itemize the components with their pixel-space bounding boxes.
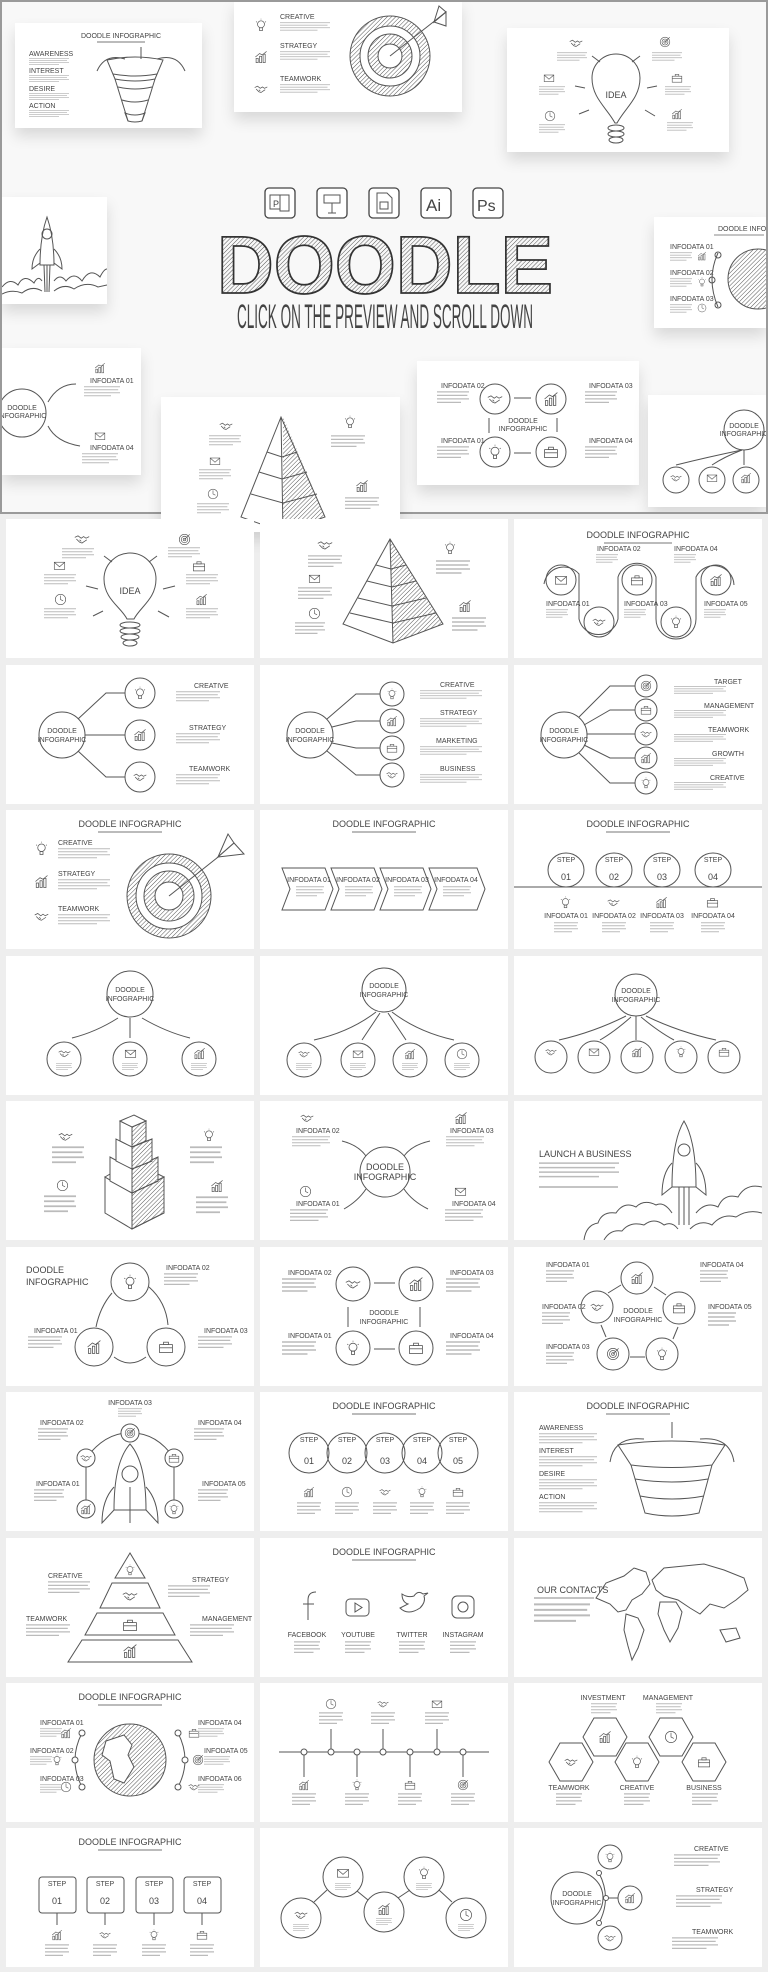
row 7 cell 1: rocket with circles: INFODATA 02 <box>40 1420 84 1427</box>
row 10 cell 1: step boxes <box>6 1828 254 1967</box>
row 4 cell 2: tree 4 <box>260 956 508 1095</box>
card: cycle slide: INFODATA 01 <box>441 438 485 445</box>
row 6 cell 3: 5-cycle <box>514 1247 762 1386</box>
row 7 cell 2: 5 steps: 04 <box>417 1456 427 1466</box>
card: arrows slide: INFODATA 01 <box>90 378 134 385</box>
row 5 cell 2: radial arrows: INFODATA 02 <box>296 1128 340 1135</box>
row 6 cell 2: 4-cycle: INFODATA 04 <box>450 1333 494 1340</box>
row 1 cell 3: snake path: INFODATA 03 <box>624 601 668 608</box>
row 5 cell 3: rocket launch: LAUNCH A BUSINESS <box>539 1149 632 1159</box>
card: funnel slide: DOODLE INFOGRAPHIC <box>81 33 161 40</box>
row 9 cell 3: hexagons <box>514 1683 762 1822</box>
row 2 cell 2: mind map 4: STRATEGY <box>440 710 478 717</box>
row 7 cell 3: funnel: INTEREST <box>539 1448 574 1455</box>
row 8 cell 3: contacts map: OUR CONTACTS <box>537 1585 608 1595</box>
row 4 cell 1: tree 3 <box>6 956 254 1095</box>
row 7 cell 3: funnel: ACTION <box>539 1494 565 1501</box>
row 4 cell 2: tree 4: INFOGRAPHIC <box>360 992 408 999</box>
row 3 cell 3: steps on line: DOODLE INFOGRAPHIC <box>586 819 690 829</box>
row 6 cell 1: 3-cycle: DOODLE <box>26 1265 64 1275</box>
row 3 cell 2: chevrons: INFODATA 04 <box>434 877 478 884</box>
row 3 cell 3: steps on line: 01 <box>561 872 571 882</box>
row 4 cell 1: tree 3: INFOGRAPHIC <box>106 996 154 1003</box>
row 8 cell 2: social: YOUTUBE <box>341 1632 375 1639</box>
row 2 cell 1: mind map 3 <box>6 665 254 804</box>
card: funnel slide: INTEREST <box>29 68 64 75</box>
row 6 cell 2: 4-cycle: INFOGRAPHIC <box>360 1319 408 1326</box>
row 3 cell 1: target: CREATIVE <box>58 840 93 847</box>
row 2 cell 3: mind map 5: DOODLE <box>549 728 579 735</box>
row 4 cell 2: tree 4: DOODLE <box>369 983 399 990</box>
row 9 cell 1: globe: INFODATA 01 <box>40 1720 84 1727</box>
app icons row: Ai <box>426 196 441 215</box>
card: globe slide: INFODATA 03 <box>670 296 714 303</box>
row 10 cell 1: step boxes: 01 <box>52 1896 62 1906</box>
row 6 cell 1: 3-cycle: INFODATA 01 <box>34 1328 78 1335</box>
row 2 cell 1: mind map 3: CREATIVE <box>194 683 229 690</box>
row 8 cell 2: social <box>260 1538 508 1677</box>
row 10 cell 3: hub circles <box>514 1828 762 1967</box>
row 6 cell 3: 5-cycle: INFODATA 01 <box>546 1262 590 1269</box>
row 6 cell 2: 4-cycle: INFODATA 02 <box>288 1270 332 1277</box>
app icons row <box>264 187 504 219</box>
row 8 cell 1: tier pyramid: STRATEGY <box>192 1577 230 1584</box>
row 1 cell 3: snake path: INFODATA 05 <box>704 601 748 608</box>
row 6 cell 2: 4-cycle: DOODLE <box>369 1310 399 1317</box>
row 3 cell 3: steps on line <box>514 810 762 949</box>
card: pyramid slide <box>161 397 400 532</box>
row 8 cell 2: social: DOODLE INFOGRAPHIC <box>332 1547 436 1557</box>
row 6 cell 3: 5-cycle: INFODATA 03 <box>546 1344 590 1351</box>
row 2 cell 2: mind map 4: BUSINESS <box>440 766 476 773</box>
app icons row: Ps <box>477 198 496 215</box>
row 9 cell 2: timeline <box>260 1683 508 1822</box>
row 10 cell 3: hub circles: DOODLE <box>562 1891 592 1898</box>
row 10 cell 1: step boxes: STEP <box>48 1881 66 1888</box>
row 9 cell 1: globe: INFODATA 05 <box>204 1748 248 1755</box>
row 5 cell 2: radial arrows: INFODATA 01 <box>296 1201 340 1208</box>
row 2 cell 1: mind map 3: DOODLE <box>47 728 77 735</box>
row 5 cell 1: stacked boxes <box>6 1101 254 1240</box>
row 6 cell 3: 5-cycle: INFODATA 04 <box>700 1262 744 1269</box>
row 3 cell 2: chevrons: INFODATA 03 <box>385 877 429 884</box>
card: tree slide <box>648 395 766 507</box>
row 7 cell 1: rocket with circles: INFODATA 04 <box>198 1420 242 1427</box>
row 6 cell 2: 4-cycle: INFODATA 03 <box>450 1270 494 1277</box>
row 7 cell 2: 5 steps: 01 <box>304 1456 314 1466</box>
row 3 cell 2: chevrons <box>260 810 508 949</box>
row 7 cell 2: 5 steps: DOODLE INFOGRAPHIC <box>332 1401 436 1411</box>
row 3 cell 3: steps on line: 03 <box>657 872 667 882</box>
row 6 cell 2: 4-cycle: INFODATA 01 <box>288 1333 332 1340</box>
row 9 cell 1: globe: INFODATA 06 <box>198 1776 242 1783</box>
row 3 cell 1: target: DOODLE INFOGRAPHIC <box>78 819 182 829</box>
row 3 cell 3: steps on line: STEP <box>557 857 575 864</box>
card: globe slide: INFODATA 01 <box>670 244 714 251</box>
row 6 cell 1: 3-cycle <box>6 1247 254 1386</box>
row 1 cell 1: idea bulb: IDEA <box>119 586 141 596</box>
row 10 cell 1: step boxes: DOODLE INFOGRAPHIC <box>78 1837 182 1847</box>
card: arrows slide: DOODLE <box>7 405 37 412</box>
row 9 cell 1: globe: INFODATA 02 <box>30 1748 74 1755</box>
row 7 cell 2: 5 steps: 03 <box>380 1456 390 1466</box>
row 6 cell 3: 5-cycle: INFOGRAPHIC <box>614 1317 662 1324</box>
banner: top preview collage <box>0 0 768 514</box>
row 3 cell 3: steps on line: STEP <box>704 857 722 864</box>
row 1 cell 1: idea bulb <box>6 519 254 658</box>
row 6 cell 1: 3-cycle: INFOGRAPHIC <box>26 1277 89 1287</box>
row 3 cell 1: target <box>6 810 254 949</box>
row 7 cell 2: 5 steps: STEP <box>338 1437 356 1444</box>
row 2 cell 2: mind map 4: DOODLE <box>295 728 325 735</box>
row 10 cell 3: hub circles: STRATEGY <box>696 1887 734 1894</box>
row 2 cell 2: mind map 4: CREATIVE <box>440 682 475 689</box>
row 10 cell 1: step boxes: STEP <box>193 1881 211 1888</box>
row 8 cell 1: tier pyramid <box>6 1538 254 1677</box>
row 1 cell 3: snake path: INFODATA 04 <box>674 546 718 553</box>
card: funnel slide: DESIRE <box>29 86 55 93</box>
card: target slide: CREATIVE <box>280 14 315 21</box>
row 2 cell 1: mind map 3: INFOGRAPHIC <box>38 737 86 744</box>
card: cycle slide: INFODATA 04 <box>589 438 633 445</box>
row 2 cell 3: mind map 5: MANAGEMENT <box>704 703 755 710</box>
row 9 cell 1: globe: INFODATA 04 <box>198 1720 242 1727</box>
card: globe slide: INFODATA 02 <box>670 270 714 277</box>
row 5 cell 2: radial arrows: INFOGRAPHIC <box>354 1172 417 1182</box>
card: globe slide <box>654 217 766 328</box>
row 2 cell 2: mind map 4: MARKETING <box>436 738 478 745</box>
row 7 cell 3: funnel <box>514 1392 762 1531</box>
row 3 cell 1: target: STRATEGY <box>58 871 96 878</box>
row 8 cell 1: tier pyramid: CREATIVE <box>48 1573 83 1580</box>
card: funnel slide <box>15 23 202 128</box>
row 2 cell 3: mind map 5: TARGET <box>714 679 743 686</box>
card: cycle slide <box>417 361 639 485</box>
row 7 cell 2: 5 steps: STEP <box>413 1437 431 1444</box>
row 7 cell 2: 5 steps <box>260 1392 508 1531</box>
row 10 cell 3: hub circles: CREATIVE <box>694 1846 729 1853</box>
card: cycle slide: INFODATA 02 <box>441 383 485 390</box>
row 7 cell 2: 5 steps: 02 <box>342 1456 352 1466</box>
row 5 cell 2: radial arrows: INFODATA 03 <box>450 1128 494 1135</box>
row 9 cell 3: hexagons: INVESTMENT <box>580 1695 626 1702</box>
row 10 cell 1: step boxes: STEP <box>145 1881 163 1888</box>
row 10 cell 1: step boxes: 03 <box>149 1896 159 1906</box>
row 9 cell 3: hexagons: BUSINESS <box>686 1785 722 1792</box>
card: cycle slide: INFOGRAPHIC <box>499 426 547 433</box>
card: target slide <box>234 0 462 112</box>
row 4 cell 1: tree 3: DOODLE <box>115 987 145 994</box>
row 3 cell 3: steps on line: 02 <box>609 872 619 882</box>
row 9 cell 1: globe: DOODLE INFOGRAPHIC <box>78 1692 182 1702</box>
row 10 cell 1: step boxes: STEP <box>96 1881 114 1888</box>
card: target slide: TEAMWORK <box>280 76 322 83</box>
row 4 cell 3: tree 5: DOODLE <box>621 988 651 995</box>
row 7 cell 1: rocket with circles: INFODATA 05 <box>202 1481 246 1488</box>
row 10 cell 2: zigzag circles <box>260 1828 508 1967</box>
row 7 cell 2: 5 steps: 05 <box>453 1456 463 1466</box>
row 8 cell 1: tier pyramid: TEAMWORK <box>26 1616 68 1623</box>
row 3 cell 3: steps on line: STEP <box>653 857 671 864</box>
row 1 cell 3: snake path: DOODLE INFOGRAPHIC <box>586 530 690 540</box>
card: arrows slide <box>2 348 141 475</box>
row 6 cell 3: 5-cycle: DOODLE <box>623 1308 653 1315</box>
card: rocket slide <box>2 197 107 304</box>
row 10 cell 1: step boxes: 04 <box>197 1896 207 1906</box>
row 7 cell 1: rocket with circles: INFODATA 03 <box>108 1400 152 1407</box>
row 5 cell 2: radial arrows: INFODATA 04 <box>452 1201 496 1208</box>
row 1 cell 3: snake path: INFODATA 01 <box>546 601 590 608</box>
row 2 cell 3: mind map 5: CREATIVE <box>710 775 745 782</box>
row 2 cell 3: mind map 5: GROWTH <box>712 751 744 758</box>
card: idea bulb slide <box>507 28 729 152</box>
row 5 cell 3: rocket launch <box>514 1101 762 1240</box>
row 6 cell 3: 5-cycle: INFODATA 05 <box>708 1304 752 1311</box>
row 10 cell 3: hub circles: INFOGRAPHIC <box>553 1900 601 1907</box>
row 9 cell 3: hexagons: MANAGEMENT <box>643 1695 694 1702</box>
row 2 cell 3: mind map 5: INFOGRAPHIC <box>540 737 588 744</box>
row 7 cell 2: 5 steps: STEP <box>376 1437 394 1444</box>
app icons row: P <box>273 199 279 209</box>
row 8 cell 2: social: TWITTER <box>396 1632 428 1639</box>
card: target slide: STRATEGY <box>280 43 318 50</box>
row 9 cell 3: hexagons: TEAMWORK <box>548 1785 590 1792</box>
row 4 cell 3: tree 5 <box>514 956 762 1095</box>
row 8 cell 2: social: FACEBOOK <box>288 1632 327 1639</box>
row 10 cell 3: hub circles: TEAMWORK <box>692 1929 734 1936</box>
row 3 cell 1: target: TEAMWORK <box>58 906 100 913</box>
row 7 cell 2: 5 steps: STEP <box>300 1437 318 1444</box>
row 7 cell 3: funnel: DESIRE <box>539 1471 565 1478</box>
row 3 cell 2: chevrons: DOODLE INFOGRAPHIC <box>332 819 436 829</box>
row 1 cell 2: pyramid <box>260 519 508 658</box>
row 3 cell 3: steps on line: INFODATA 03 <box>640 913 684 920</box>
card: cycle slide: DOODLE <box>508 418 538 425</box>
row 1 cell 3: snake path <box>514 519 762 658</box>
row 7 cell 3: funnel: DOODLE INFOGRAPHIC <box>586 1401 690 1411</box>
row 1 cell 3: snake path: INFODATA 02 <box>597 546 641 553</box>
row 2 cell 3: mind map 5: TEAMWORK <box>708 727 750 734</box>
row 2 cell 1: mind map 3: TEAMWORK <box>189 766 231 773</box>
row 2 cell 1: mind map 3: STRATEGY <box>189 725 227 732</box>
row 2 cell 2: mind map 4 <box>260 665 508 804</box>
card: funnel slide: AWARENESS <box>29 51 74 58</box>
card: arrows slide: INFODATA 04 <box>90 445 134 452</box>
row 6 cell 1: 3-cycle: INFODATA 02 <box>166 1265 210 1272</box>
row 8 cell 1: tier pyramid: MANAGEMENT <box>202 1616 253 1623</box>
card: tree slide: DOODLE <box>729 423 759 430</box>
row 7 cell 2: 5 steps: STEP <box>449 1437 467 1444</box>
row 5 cell 2: radial arrows <box>260 1101 508 1240</box>
card: funnel slide: ACTION <box>29 103 55 110</box>
row 7 cell 1: rocket with circles: INFODATA 01 <box>36 1481 80 1488</box>
row 9 cell 3: hexagons: CREATIVE <box>620 1785 655 1792</box>
row 3 cell 3: steps on line: INFODATA 02 <box>592 913 636 920</box>
row 7 cell 3: funnel: AWARENESS <box>539 1425 584 1432</box>
card: cycle slide: INFODATA 03 <box>589 383 633 390</box>
row 8 cell 2: social: INSTAGRAM <box>442 1632 484 1639</box>
row 9 cell 1: globe: INFODATA 03 <box>40 1776 84 1783</box>
row 6 cell 2: 4-cycle <box>260 1247 508 1386</box>
row 5 cell 2: radial arrows: DOODLE <box>366 1162 404 1172</box>
row 10 cell 1: step boxes: 02 <box>100 1896 110 1906</box>
row 6 cell 3: 5-cycle: INFODATA 02 <box>542 1304 586 1311</box>
row 9 cell 1: globe <box>6 1683 254 1822</box>
row 3 cell 3: steps on line: INFODATA 01 <box>544 913 588 920</box>
row 3 cell 2: chevrons: INFODATA 01 <box>287 877 331 884</box>
row 2 cell 3: mind map 5 <box>514 665 762 804</box>
card: idea bulb slide: IDEA <box>605 90 627 100</box>
row 6 cell 1: 3-cycle: INFODATA 03 <box>204 1328 248 1335</box>
row 4 cell 3: tree 5: INFOGRAPHIC <box>612 997 660 1004</box>
row 3 cell 3: steps on line: INFODATA 04 <box>691 913 735 920</box>
row 3 cell 3: steps on line: 04 <box>708 872 718 882</box>
row 3 cell 3: steps on line: STEP <box>605 857 623 864</box>
row 7 cell 1: rocket with circles <box>6 1392 254 1531</box>
row 8 cell 3: contacts map <box>514 1538 762 1677</box>
row 3 cell 2: chevrons: INFODATA 02 <box>336 877 380 884</box>
row 2 cell 2: mind map 4: INFOGRAPHIC <box>286 737 334 744</box>
